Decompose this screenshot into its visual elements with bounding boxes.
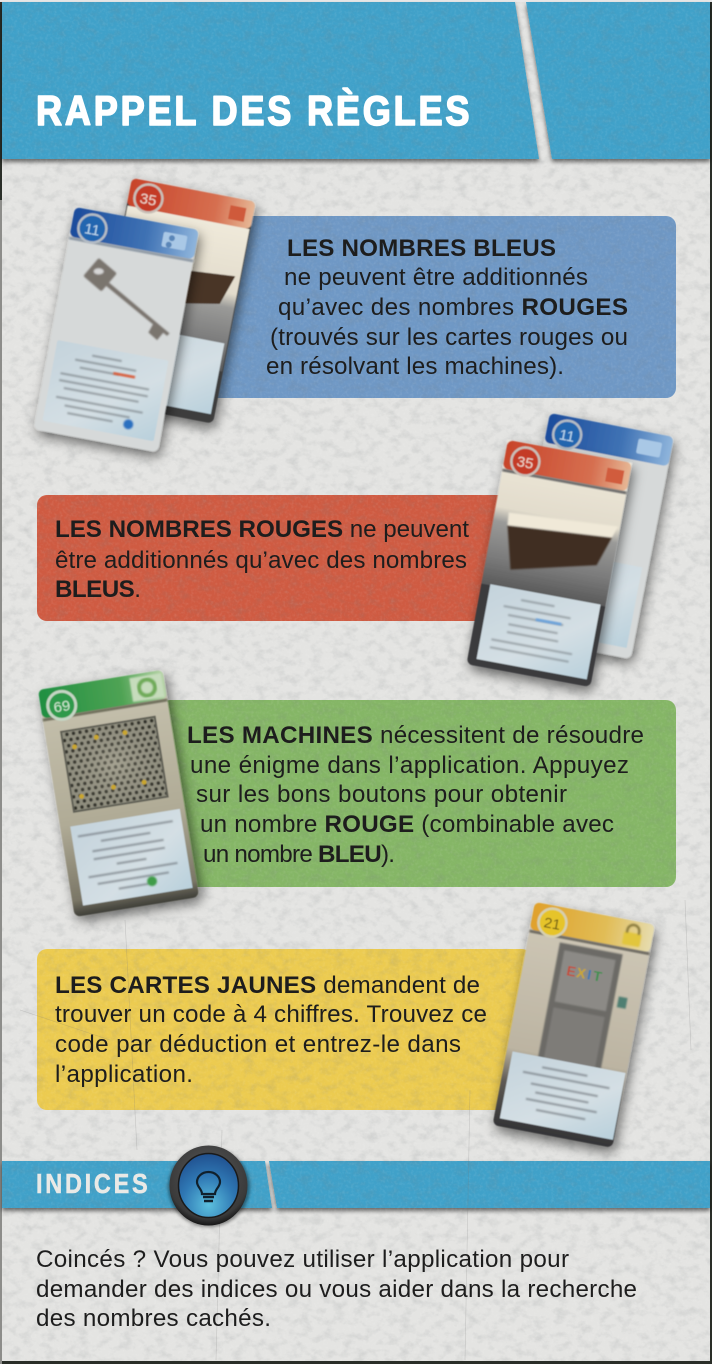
text: blue numbers: en résolvant les machines). <box>266 353 564 380</box>
text: yellow cards: code par déduction et entrez-le dans <box>55 1031 461 1058</box>
text: yellow cards <box>55 972 487 1088</box>
text: machines: LES MACHINES nécessitent de résoudre <box>187 722 644 749</box>
panel: red numbers <box>37 495 517 621</box>
text: machines: sur les bons boutons pour obtenir <box>196 781 567 808</box>
text: hints <box>36 1246 637 1332</box>
card: red back: 35 <box>138 190 158 210</box>
text: machines <box>187 722 644 868</box>
card: green machine: 69 <box>52 697 72 717</box>
text: yellow cards: trouver un code à 4 chiffres. Trouvez ce <box>55 1001 487 1028</box>
text: machines: une énigme dans l’application. Appuyez <box>190 752 629 779</box>
exit sign: I <box>586 966 593 983</box>
text: hints: Coincés ? Vous pouvez utiliser l’application pour <box>36 1246 569 1273</box>
exit sign <box>565 962 604 985</box>
text: blue numbers: LES NOMBRES BLEUS <box>287 235 556 262</box>
card: yellow door <box>492 902 655 1148</box>
exit sign: T <box>592 967 604 985</box>
title: RAPPEL DES RÈGLES <box>36 87 469 135</box>
text: machines: un nombre ROUGE (combinable avec <box>200 811 614 838</box>
text: red numbers: être additionnés qu’avec des nombres <box>55 547 467 574</box>
icon: light bulb badge <box>168 1146 250 1227</box>
panel: machines <box>160 700 676 887</box>
text: red numbers <box>55 516 469 603</box>
exit sign: X <box>575 964 588 982</box>
padlock <box>622 923 643 947</box>
heading: hints: INDICES <box>36 1169 148 1199</box>
icon: key <box>74 256 181 342</box>
text: hints: demander des indices ou vous aider dans la recherche <box>36 1276 637 1303</box>
text: red numbers: LES NOMBRES ROUGES ne peuvent <box>55 516 469 543</box>
exit sign: E <box>565 962 577 980</box>
panel: hints band <box>2 1161 710 1208</box>
card: blue back <box>507 413 674 659</box>
text: hints: des nombres cachés. <box>36 1305 271 1332</box>
card: red back <box>89 178 256 424</box>
text: blue numbers: qu’avec des nombres ROUGES <box>278 294 628 321</box>
card pair: red and blue cards <box>466 413 674 687</box>
panel: blue numbers <box>190 216 676 398</box>
text: red numbers: BLEUS. <box>55 576 141 603</box>
card: red drawer: 35 <box>515 453 535 473</box>
text: blue numbers <box>266 235 628 380</box>
card: red drawer <box>466 440 632 687</box>
text: machines: un nombre BLEU). <box>203 841 395 868</box>
card: blue key: 11 <box>83 220 101 240</box>
text: blue numbers: ne peuvent être additionnés <box>284 264 588 291</box>
grate <box>61 717 168 812</box>
card: blue back: 11 <box>558 426 576 446</box>
card pair: blue and red cards <box>34 178 256 452</box>
card: blue key <box>34 207 199 452</box>
text: yellow cards: LES CARTES JAUNES demandent de <box>55 972 480 999</box>
card: yellow door: 21 <box>542 914 562 934</box>
panel: yellow cards <box>37 949 532 1110</box>
text: yellow cards: l’application. <box>55 1061 193 1088</box>
card: green machine <box>38 670 199 917</box>
door <box>538 942 623 1070</box>
panel: header banner <box>2 2 710 159</box>
text: blue numbers: (trouvés sur les cartes rouges ou <box>270 324 628 351</box>
